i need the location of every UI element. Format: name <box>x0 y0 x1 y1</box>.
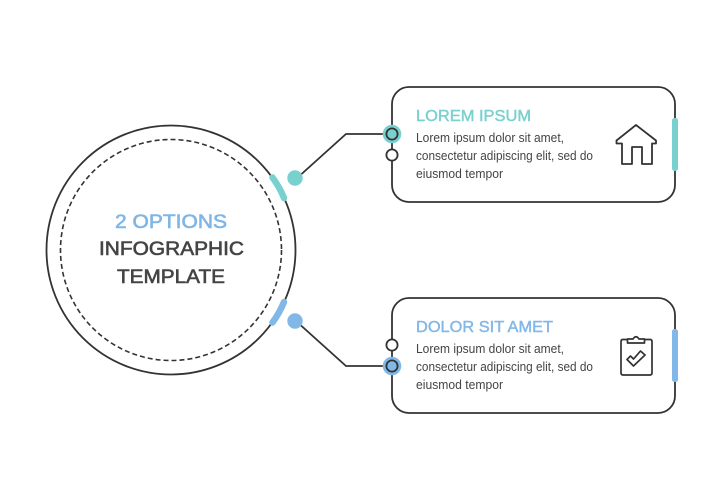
accent arc: blue <box>272 302 284 322</box>
side accent bar <box>672 118 678 171</box>
heading: DOLOR SIT AMET <box>416 319 553 336</box>
title: 2 options: 2 OPTIONS <box>115 212 227 233</box>
body text <box>416 130 593 181</box>
body text: Lorem ipsum dolor sit amet, <box>416 341 564 356</box>
open node <box>386 339 398 351</box>
open node <box>386 149 398 161</box>
heading: LOREM IPSUM <box>416 108 531 125</box>
panel outline <box>392 87 675 202</box>
body text: eiusmod tempor <box>416 166 504 181</box>
title: template: TEMPLATE <box>117 267 225 288</box>
body text: Lorem ipsum dolor sit amet, <box>416 130 564 145</box>
body text: consectetur adipiscing elit, sed do <box>416 359 593 374</box>
outer circle <box>46 126 296 374</box>
highlighted node <box>383 125 401 143</box>
icon: clipboard with check <box>621 337 652 375</box>
connector line bottom <box>301 326 386 366</box>
connector dot bottom <box>287 313 303 329</box>
title: infographic: INFOGRAPHIC <box>99 239 244 260</box>
side accent bar <box>672 329 678 382</box>
panel: dolor sit amet <box>383 298 678 413</box>
body text: consectetur adipiscing elit, sed do <box>416 148 593 163</box>
panel outline <box>392 298 675 413</box>
connector line top <box>301 134 386 174</box>
icon: house <box>616 125 656 164</box>
body text: eiusmod tempor <box>416 377 504 392</box>
accent arc: teal <box>272 178 284 198</box>
central circle with title <box>46 126 296 374</box>
connector dot top <box>287 170 303 186</box>
panel: lorem ipsum <box>383 87 678 202</box>
connector: bottom <box>287 313 386 366</box>
dashed inner circle <box>60 140 282 360</box>
highlighted node <box>383 357 401 375</box>
body text <box>416 341 593 392</box>
connector: top <box>287 134 386 186</box>
